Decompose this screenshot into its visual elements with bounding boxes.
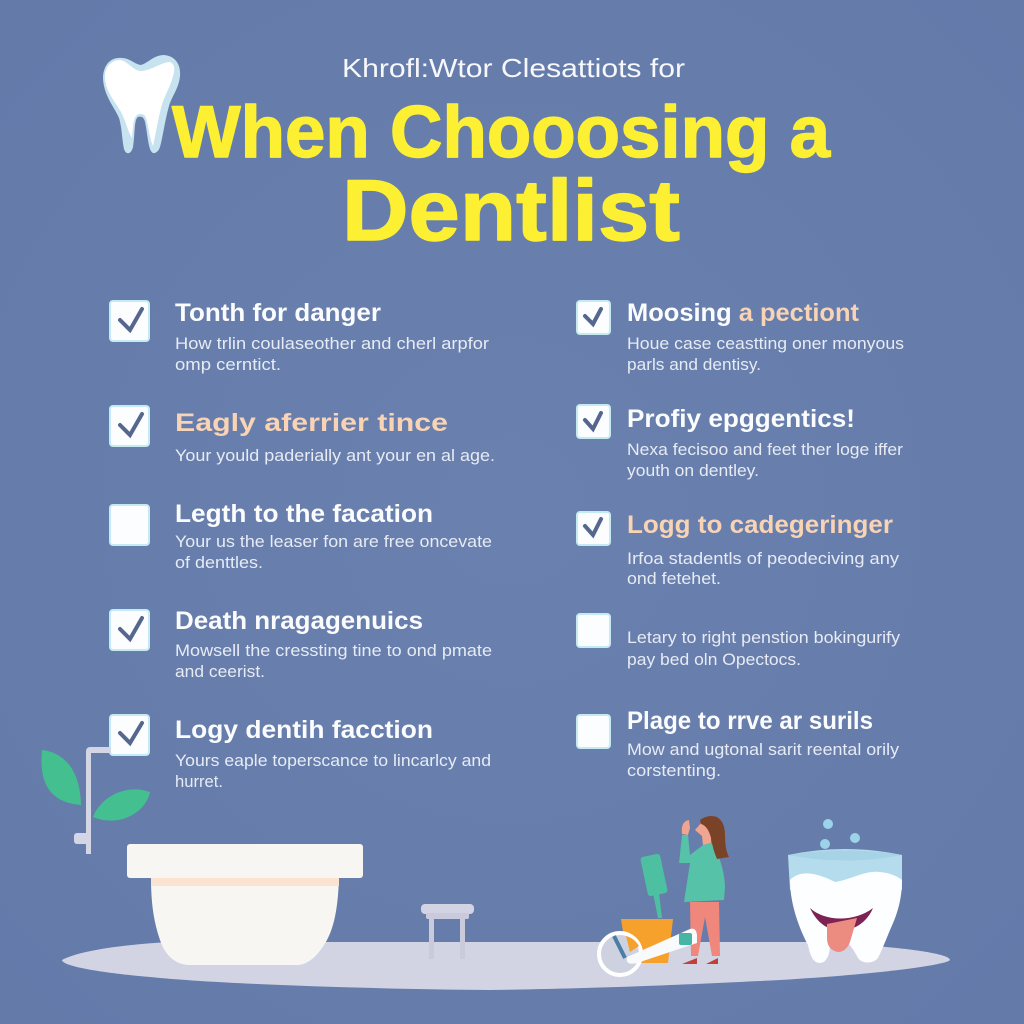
item: Plage to rrve ar surils: corstenting. [627,762,721,780]
illustration: white basin [127,844,363,965]
item: Logg to cadegeringer: Irfoa stadentls of peodeciving any [627,550,900,568]
item: Eagly aferrier tince: Your yould paderially ant your en al age. [175,447,495,465]
item: Moosing a pectiont [577,299,904,374]
illustration: flosser wheel [599,929,697,975]
item: Logg to cadegeringer: Logg to cadegeringer [627,511,893,539]
item: Logy dentih facction: hurret. [175,773,223,791]
item: Profiy epggentics: Profiy epggentics! [627,405,855,433]
illustration: woman [679,816,729,964]
item: Legth to the facation [110,500,492,572]
item: Legth to the facation: Your us the leaser fon are free oncevate [175,533,492,551]
item: Death nragagenuics: Mowsell the cressting tine to ond pmate [175,642,492,660]
item: Death nragagenuics: and ceerist. [175,663,265,681]
item: Eagly aferrier tince: Eagly aferrier tince [175,409,448,437]
panel: left checklist [110,299,495,791]
illustration: smiling tooth with water [788,819,902,963]
item: Logy dentih facction: Logy dentih facction [175,716,433,744]
item: Profiy epggentics [577,405,904,480]
icon: plant with pipe [41,747,150,854]
item: Death nragagenuics [110,607,492,681]
item: Tonth for danger: How trlin coulaseother and cherl arpfor [175,335,490,353]
item: Moosing a pectiont: Houe case ceastting oner monyous [627,335,904,353]
illustration: cup with toothbrush [621,853,673,963]
item: Legth to the facation: of denttles. [175,554,263,572]
item: Letary to right pension: Letary to right penstion bokingurify [627,629,901,647]
item: Tonth for danger: Tonth for danger [175,299,381,327]
title: Dentlist [342,163,680,259]
item: Logg to cadegeringer [577,511,900,588]
floor ellipse [62,942,950,990]
item: Logy dentih facction: Yours eaple toperscance to lincarlcy and [175,752,491,770]
item: Logg to cadegeringer: ond fetehet. [627,570,721,588]
item: Plage to rrve ar surils: Mow and ugtonal sarit reental orily [627,741,900,759]
item: Moosing a pectiont: Moosing a pectiont [627,299,860,327]
item: Profiy epggentics: Nexa fecisoo and feet ther loge iffer [627,441,904,459]
icon: tooth [103,55,180,153]
item: Legth to the facation: Legth to the facation [175,500,433,528]
item: Eagly aferrier tince [110,406,495,465]
item: Letary to right pension: pay bed oln Opectocs. [627,651,801,669]
item: Logy dentih facction [110,715,491,791]
panel: right checklist [577,299,904,780]
item: Tonth for danger: omp cerntict. [175,356,281,374]
item: Tonth for danger [110,299,490,374]
illustration: small stool [421,904,474,959]
item: Letary to right pension [577,614,901,669]
title: When Chooosing a [172,92,831,173]
item: Plage to rrve ar surils: Plage to rrve ar surils [627,707,873,735]
title [172,92,831,259]
item: Death nragagenuics: Death nragagenuics [175,607,423,635]
item: Profiy epggentics: youth on dentley. [627,462,759,480]
item: Moosing a pectiont: parls and dentisy. [627,356,761,374]
item: Plage to rrve ar surils [577,707,900,780]
kicker heading: Khrofl:Wtor Clesattiots for [342,53,685,83]
